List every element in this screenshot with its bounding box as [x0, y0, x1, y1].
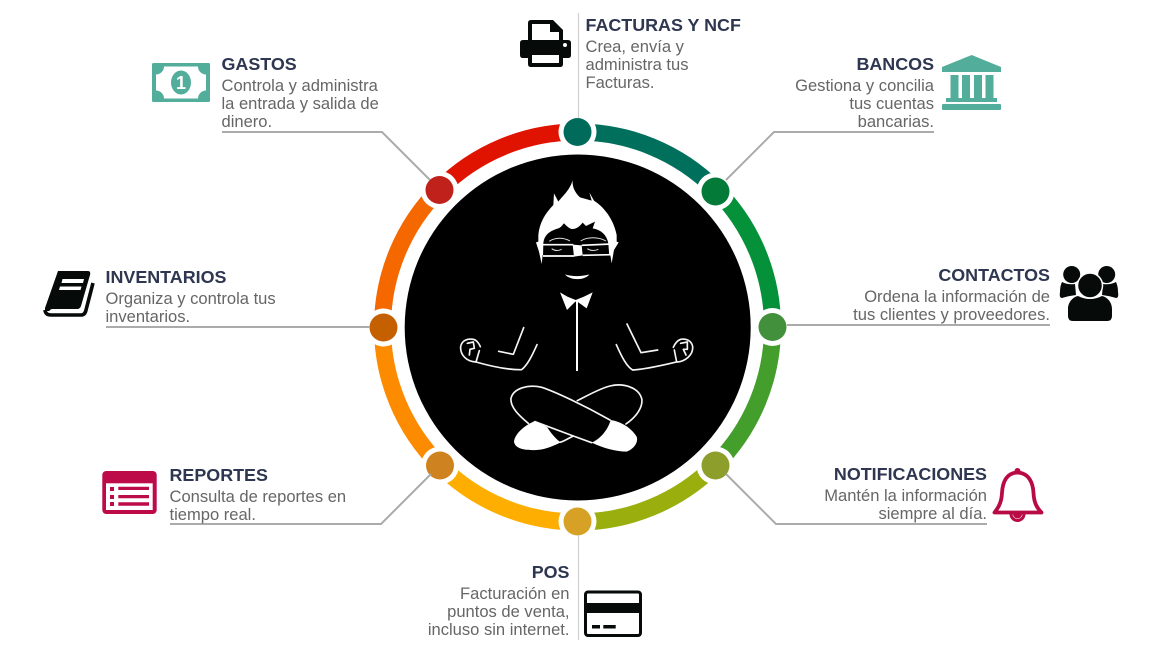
- description: incluso sin internet.: [428, 620, 570, 639]
- description: Controla y administra: [222, 76, 379, 95]
- panel: contactos: [787, 265, 1118, 325]
- icon: report window: [102, 471, 157, 514]
- black central disc: [405, 154, 751, 500]
- illustration: meditating man: [461, 180, 693, 452]
- panel: inventarios: [45, 267, 370, 327]
- ring arc segments: [382, 132, 772, 522]
- description: administra tus: [586, 55, 688, 74]
- heading: BANCOS: [856, 54, 934, 74]
- icon: banknote: [152, 63, 210, 102]
- description: tus clientes y proveedores.: [853, 305, 1050, 324]
- description: siempre al día.: [878, 504, 987, 523]
- icon: printer: [520, 20, 571, 67]
- icon: bank: [942, 55, 1001, 110]
- description: Ordena la información de: [864, 287, 1050, 306]
- icon: banknote: 1: [176, 73, 186, 93]
- description: Crea, envía y: [586, 37, 685, 56]
- panel: facturas y ncf: [520, 13, 741, 118]
- description: Facturación en: [460, 584, 570, 603]
- heading: NOTIFICACIONES: [834, 464, 987, 484]
- panel: reportes: [102, 465, 431, 524]
- description: la entrada y salida de: [222, 94, 379, 113]
- heading: REPORTES: [170, 465, 268, 485]
- heading: FACTURAS Y NCF: [586, 15, 741, 35]
- description: Gestiona y concilia: [795, 76, 935, 95]
- panel: central ring: [364, 113, 792, 540]
- heading: INVENTARIOS: [106, 267, 227, 287]
- panel: notificaciones: [726, 464, 1042, 524]
- arms and legs: [461, 300, 693, 452]
- heading: POS: [532, 562, 570, 582]
- icon: book: [45, 271, 93, 315]
- icon: people: [1060, 266, 1118, 321]
- description: Facturas.: [586, 73, 654, 92]
- heading: GASTOS: [222, 54, 297, 74]
- head and bow tie: [536, 180, 619, 310]
- panel: pos: [428, 535, 640, 640]
- description: tiempo real.: [170, 505, 256, 524]
- heading: CONTACTOS: [938, 265, 1050, 285]
- ring dots: [370, 118, 786, 536]
- description: Consulta de reportes en: [170, 487, 346, 506]
- description: Organiza y controla tus: [106, 289, 276, 308]
- description: puntos de venta,: [447, 602, 570, 621]
- icon: bell: [994, 468, 1042, 520]
- panel: bancos: [726, 54, 1001, 180]
- description: tus cuentas: [849, 94, 934, 113]
- description: bancarias.: [858, 112, 934, 131]
- description: Mantén la información: [824, 486, 987, 505]
- description: inventarios.: [106, 307, 190, 326]
- white halos behind dots: [364, 113, 792, 540]
- panel: gastos: [152, 54, 430, 180]
- icon: credit card: [586, 592, 640, 636]
- description: dinero.: [222, 112, 272, 131]
